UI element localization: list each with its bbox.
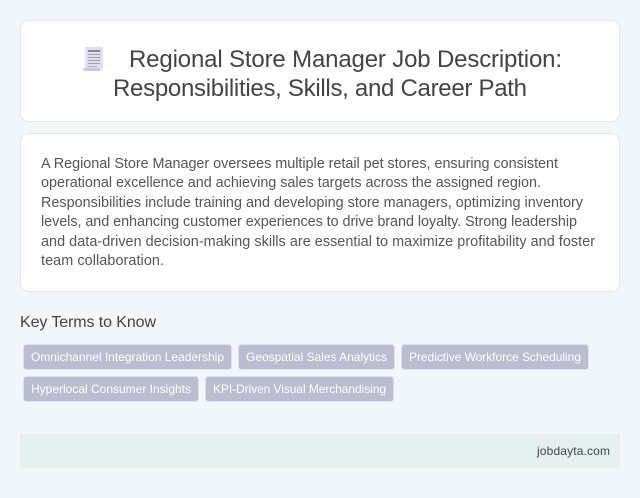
icon: document scroll bbox=[83, 47, 103, 71]
tag: kpi bbox=[206, 376, 394, 402]
tag: omnichannel: Omnichannel Integration Leadership bbox=[31, 350, 224, 364]
title: Responsibilities, Skills, and Career Path bbox=[113, 75, 527, 102]
description text: levels, and enhancing customer experiences to drive brand loyalty. Strong leadership bbox=[41, 214, 577, 230]
tag: predictive bbox=[402, 344, 588, 370]
panel: description card bbox=[20, 134, 620, 292]
title bbox=[113, 46, 562, 102]
description text: team collaboration. bbox=[41, 253, 164, 269]
tag: hyperlocal bbox=[24, 376, 198, 402]
description text: A Regional Store Manager oversees multiple retail pet stores, ensuring consistent bbox=[41, 156, 558, 172]
description text bbox=[41, 156, 595, 269]
footer source: jobdayta.com bbox=[536, 444, 610, 458]
key term tags bbox=[24, 344, 588, 402]
description text: and data-driven decision-making skills are essential to maximize profitability and foster bbox=[41, 234, 595, 250]
tag: kpi: KPI-Driven Visual Merchandising bbox=[213, 382, 386, 396]
description text: operational excellence and achieving sales targets across the assigned region. bbox=[41, 175, 541, 191]
heading: key terms: Key Terms to Know bbox=[20, 314, 156, 331]
description text: Responsibilities include training and developing store managers, optimizing inventory bbox=[41, 195, 584, 211]
tag: geospatial bbox=[238, 344, 394, 370]
title: Regional Store Manager Job Description: bbox=[129, 46, 562, 73]
tag: geospatial: Geospatial Sales Analytics bbox=[246, 350, 387, 364]
footer bar bbox=[20, 434, 620, 468]
tag: omnichannel bbox=[24, 344, 232, 370]
tag: predictive: Predictive Workforce Scheduling bbox=[409, 350, 581, 364]
panel: title card bbox=[20, 20, 620, 122]
tag: hyperlocal: Hyperlocal Consumer Insights bbox=[31, 382, 191, 396]
